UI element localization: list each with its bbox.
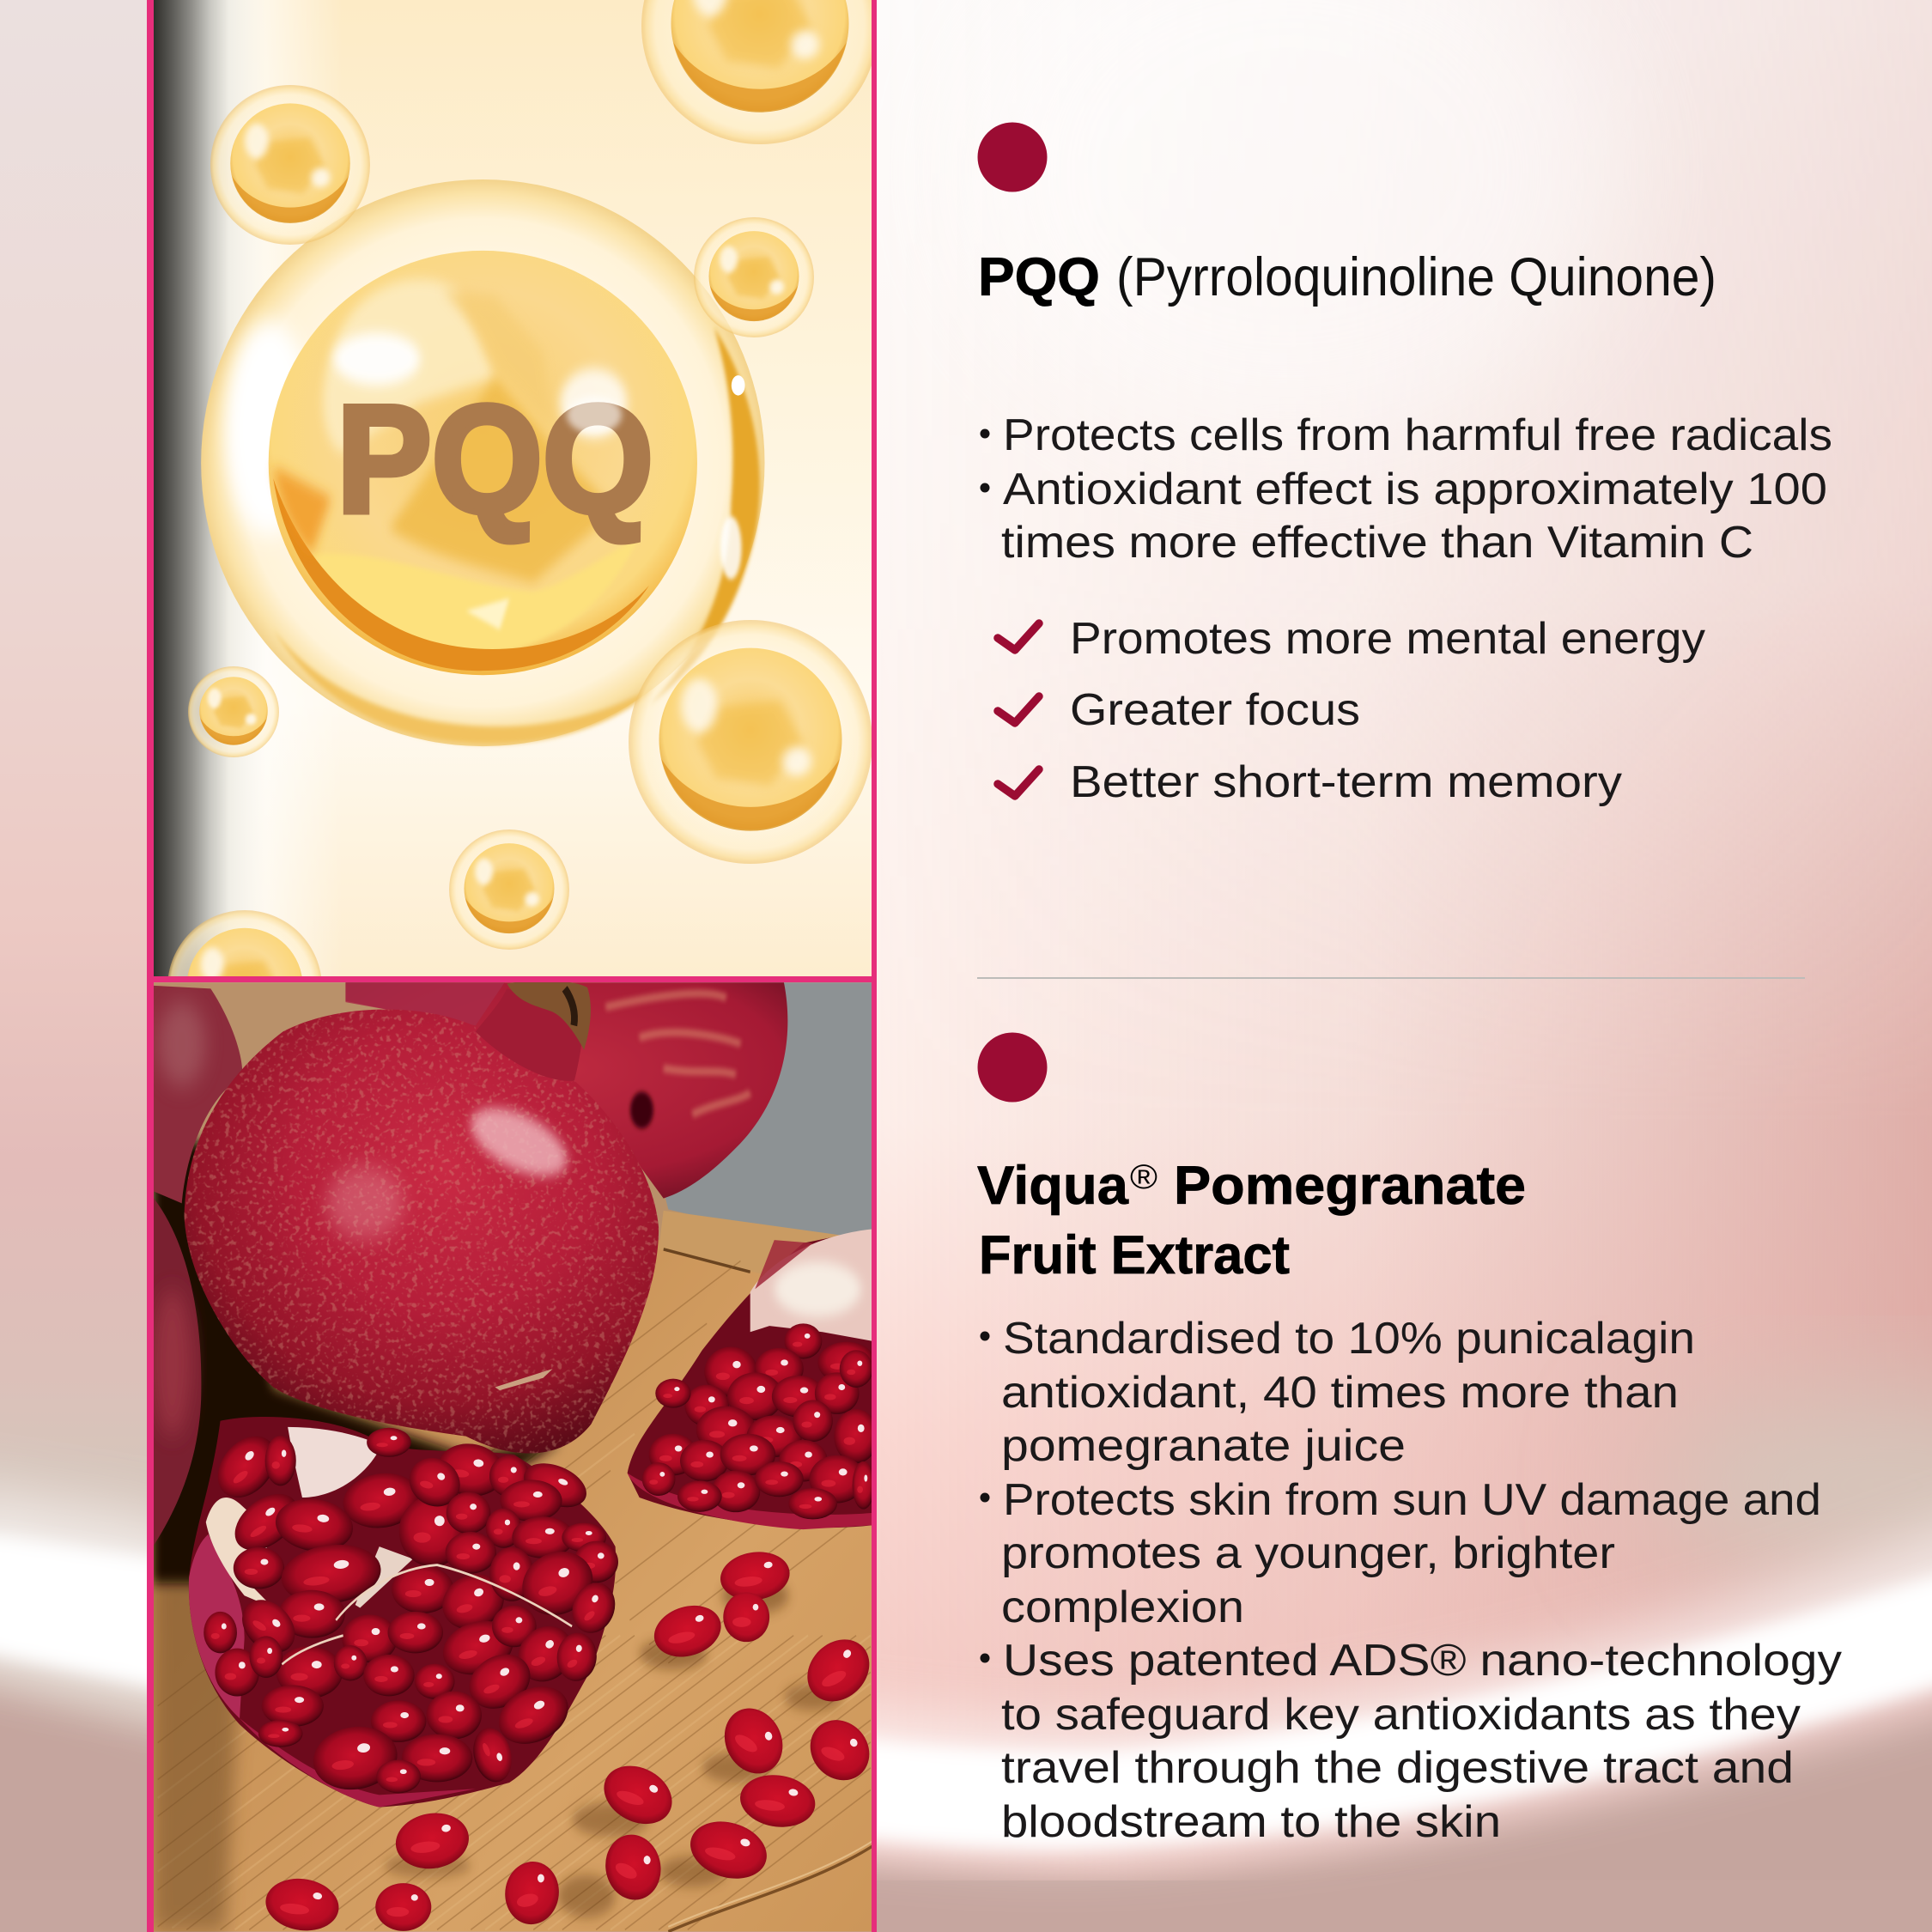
marker dot [977, 1032, 1048, 1103]
pink image frame [147, 0, 877, 1932]
PQQ bullet list: Antioxidant effect is approximately 100 [1003, 465, 1827, 514]
heading: Viqua Pomegranate Fruit Extract [977, 1156, 1526, 1285]
benefit: focus: Greater focus [1070, 685, 1360, 735]
Viqua bullet list: bloodstream to the skin [1001, 1797, 1501, 1847]
Viqua bullet list: Standardised to 10% punicalagin [1003, 1314, 1695, 1364]
small bubble right [694, 217, 814, 337]
PQQ bullet list [981, 410, 1832, 568]
PQQ bullet list: times more effective than Vitamin C [1001, 518, 1753, 568]
Viqua bullet list: Protects skin from sun UV damage and [1003, 1475, 1821, 1525]
Viqua bullet list: promotes a younger, brighter [1001, 1528, 1615, 1578]
panel: pomegranate photo [153, 981, 878, 1932]
loose pomegranate seeds [264, 1548, 876, 1932]
wood board and background [153, 982, 876, 1932]
Viqua bullet list: Uses patented ADS® nano-technology [1003, 1636, 1842, 1686]
heading: PQQ: (Pyrroloquinoline Quinone) [1116, 247, 1716, 307]
large PQQ bubble [201, 179, 765, 746]
section: PQQ [977, 122, 1832, 807]
bubble bottom left [167, 910, 322, 1065]
Viqua bullet list [981, 1314, 1842, 1847]
background pomegranate right [345, 982, 787, 1199]
heading: Viqua Pomegranate Fruit Extract: Viqua [977, 1156, 1129, 1216]
small bubble top left [210, 85, 370, 245]
marker dot [977, 122, 1048, 192]
background pomegranate left [153, 986, 242, 1546]
panel: PQQ golden bubbles image [154, 0, 878, 1065]
heading: Viqua Pomegranate Fruit Extract: Fruit Extract [979, 1225, 1290, 1285]
section: Viqua Pomegranate [977, 1032, 1842, 1847]
small bubble left [188, 666, 279, 757]
Viqua bullet list: pomegranate juice [1001, 1421, 1406, 1471]
Viqua bullet list: travel through the digestive tract and [1001, 1743, 1794, 1793]
small bubble bottom [449, 829, 569, 950]
large bubble bottom right [629, 620, 872, 864]
heading: Viqua Pomegranate Fruit Extract: Pomegranate [1174, 1156, 1526, 1216]
opened pomegranate front piece [189, 1417, 623, 1807]
Viqua bullet list: to safeguard key antioxidants as they [1001, 1690, 1801, 1740]
benefit: memory: Better short-term memory [1070, 757, 1622, 807]
heading: PQQ: PQQ [978, 247, 1100, 307]
main whole pomegranate [177, 981, 664, 1467]
Viqua bullet list: antioxidant, 40 times more than [1001, 1368, 1679, 1418]
opened pomegranate right piece [628, 1229, 878, 1529]
heading: Viqua Pomegranate Fruit Extract: ® [1130, 1158, 1157, 1196]
Viqua bullet list: complexion [1001, 1583, 1244, 1632]
bubble top right [641, 0, 878, 144]
PQQ bullet list: Protects cells from harmful free radicals [1003, 410, 1832, 460]
PQQ label: PQQ [337, 374, 653, 544]
benefit: mental energy: Promotes more mental energy [1070, 614, 1705, 664]
